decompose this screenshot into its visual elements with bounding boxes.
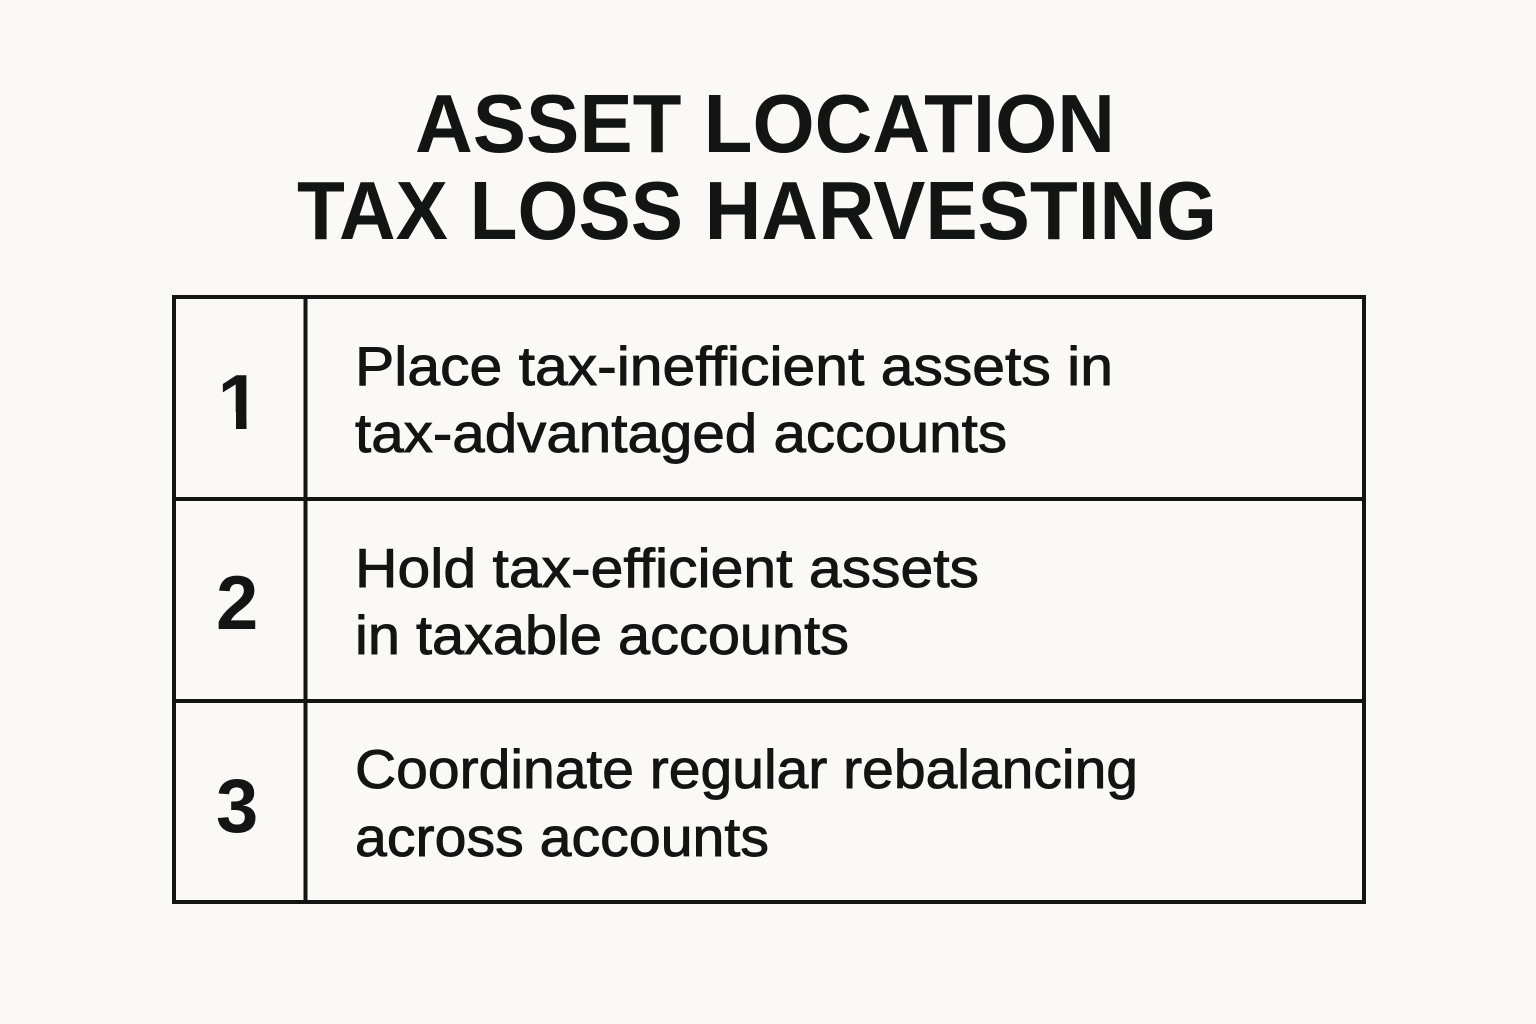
row 2 (216, 537, 979, 666)
row 1: tax-advantaged accounts (355, 402, 1007, 464)
table (174, 297, 1364, 902)
row 2: 2 (216, 561, 258, 646)
row 2: Hold tax-efficient assets (355, 537, 979, 599)
row 3 (216, 738, 1138, 868)
title (297, 77, 1217, 257)
title: TAX LOSS HARVESTING (297, 164, 1217, 257)
title: ASSET LOCATION (415, 77, 1115, 170)
row 2: in taxable accounts (355, 604, 849, 666)
row 1: Place tax-inefficient assets in (355, 335, 1113, 397)
row 3: across accounts (355, 806, 769, 868)
row 3: Coordinate regular rebalancing (355, 738, 1138, 800)
row 1 (218, 335, 1113, 464)
row 3: 3 (216, 764, 258, 849)
row 1: 1 (218, 358, 261, 446)
